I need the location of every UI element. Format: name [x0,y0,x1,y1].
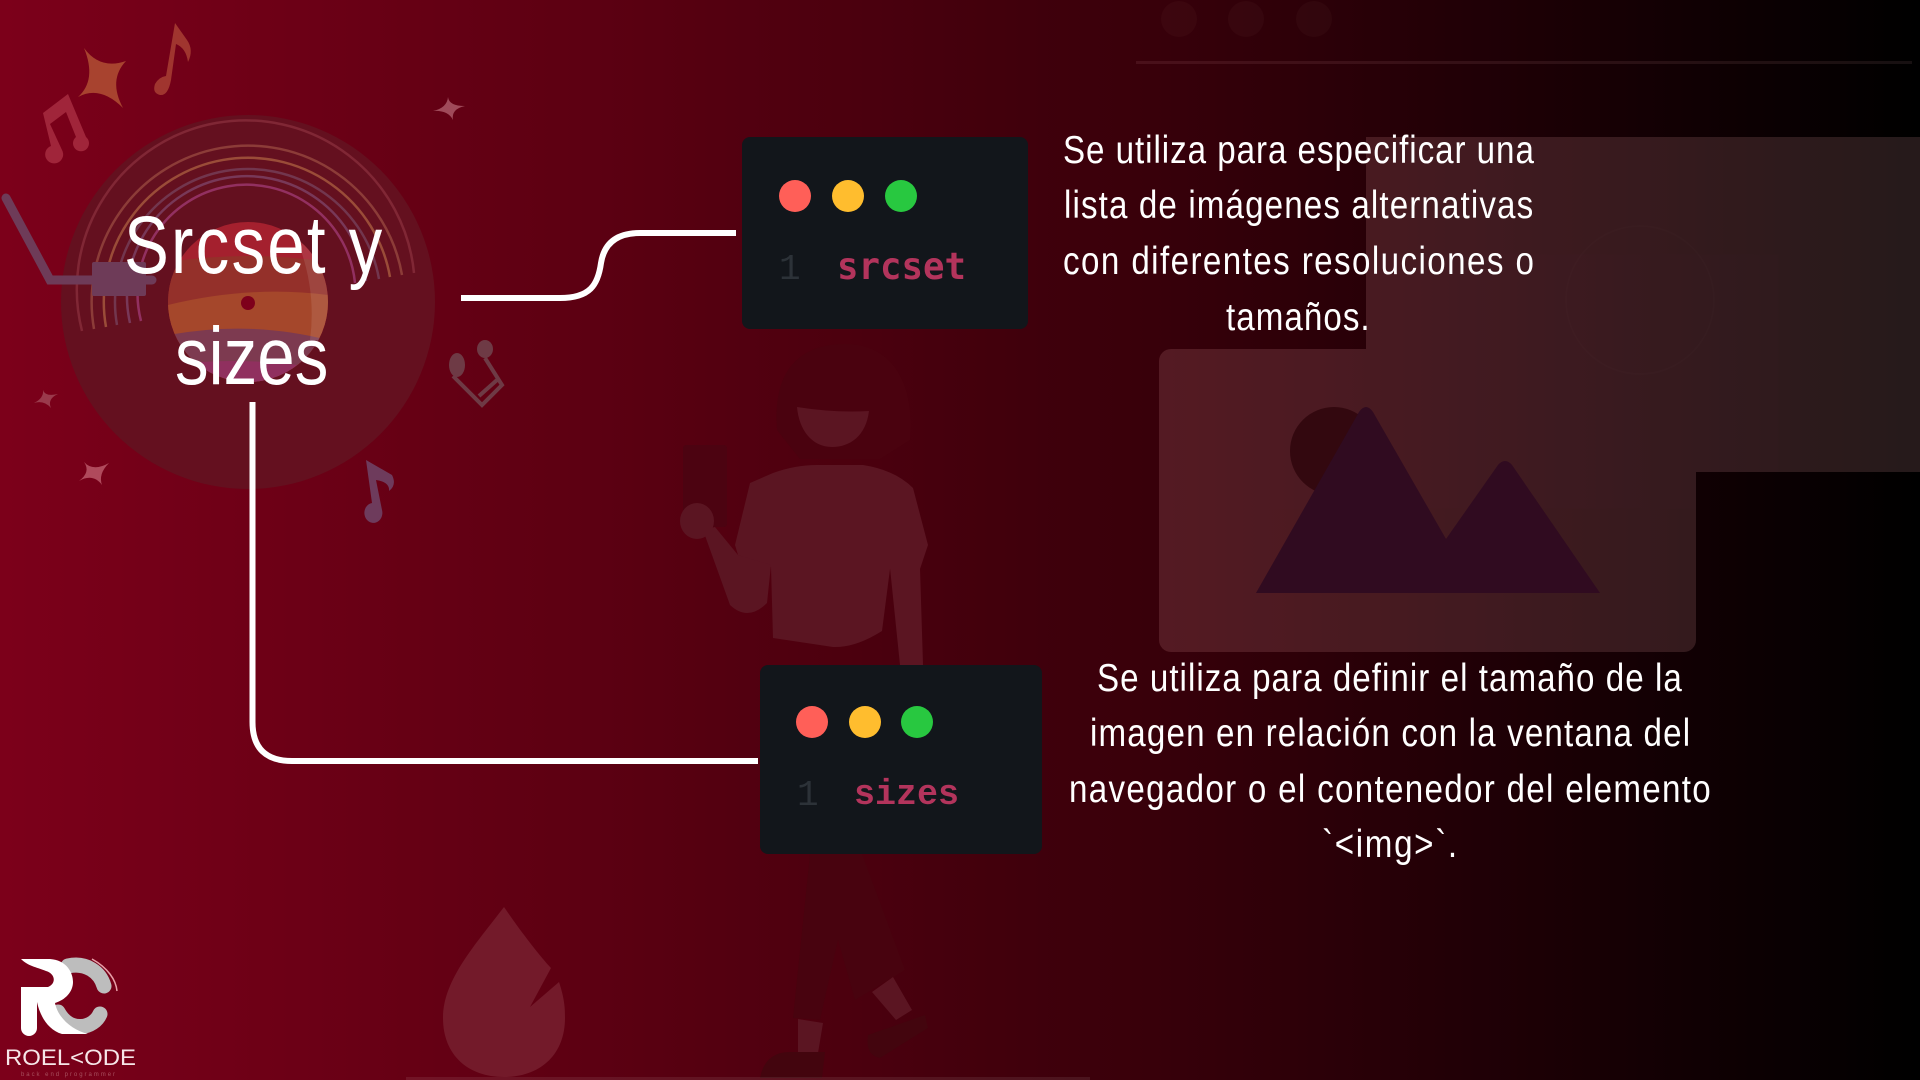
code window: sizes [760,665,1042,854]
line number: 1 [797,775,819,816]
title: Srcset y [124,199,383,290]
record label [168,222,328,384]
logo wordmark: ROEL<ODE [5,1045,136,1070]
icon: large orange star [78,48,126,108]
line number: 1 [779,249,801,290]
description: sizes: Se utiliza para definir el tamaño de la [1097,655,1683,700]
background: drop icon [406,907,1090,1080]
description: sizes [1069,655,1711,866]
background: faint panels [1159,137,1920,652]
title: sizes [175,310,328,401]
record grooves [77,120,414,331]
background: woman with phone [680,344,928,1078]
icon: small star top [433,97,465,120]
background: faint browser window [1136,1,1912,64]
icon: small star bottom [79,462,109,485]
code word: srcset [837,245,966,288]
icon: purple music note [364,460,394,523]
connector to sizes [252,402,758,761]
title [124,199,383,401]
code window: srcset [742,137,1028,329]
description: sizes: `<img>`. [1322,821,1457,866]
icon: small star left [34,390,58,408]
icon: vinyl record [61,115,435,489]
window dots [779,180,917,212]
logo mark [21,959,117,1036]
window dots [796,706,933,738]
description: srcset [1063,127,1535,339]
icon: red double note [43,94,89,163]
icon: orange music note [154,23,191,95]
description: sizes: imagen en relación con la ventana del [1090,710,1690,755]
background: image placeholder icon [1256,226,1714,593]
description: sizes: navegador o el contenedor del elemento [1069,766,1711,811]
icon: tonearm [6,198,152,296]
description: srcset: con diferentes resoluciones o [1063,238,1534,283]
description: srcset: Se utiliza para especificar una [1063,127,1535,172]
icon: earbuds [449,340,502,405]
description: srcset: tamaños. [1226,294,1370,339]
description: srcset: lista de imágenes alternativas [1064,182,1533,227]
connector to srcset [461,233,736,298]
logo tagline: back end programmer [21,1072,115,1078]
logo: RoelCode [5,959,136,1078]
record hole [241,296,255,310]
code word: sizes [854,774,959,815]
